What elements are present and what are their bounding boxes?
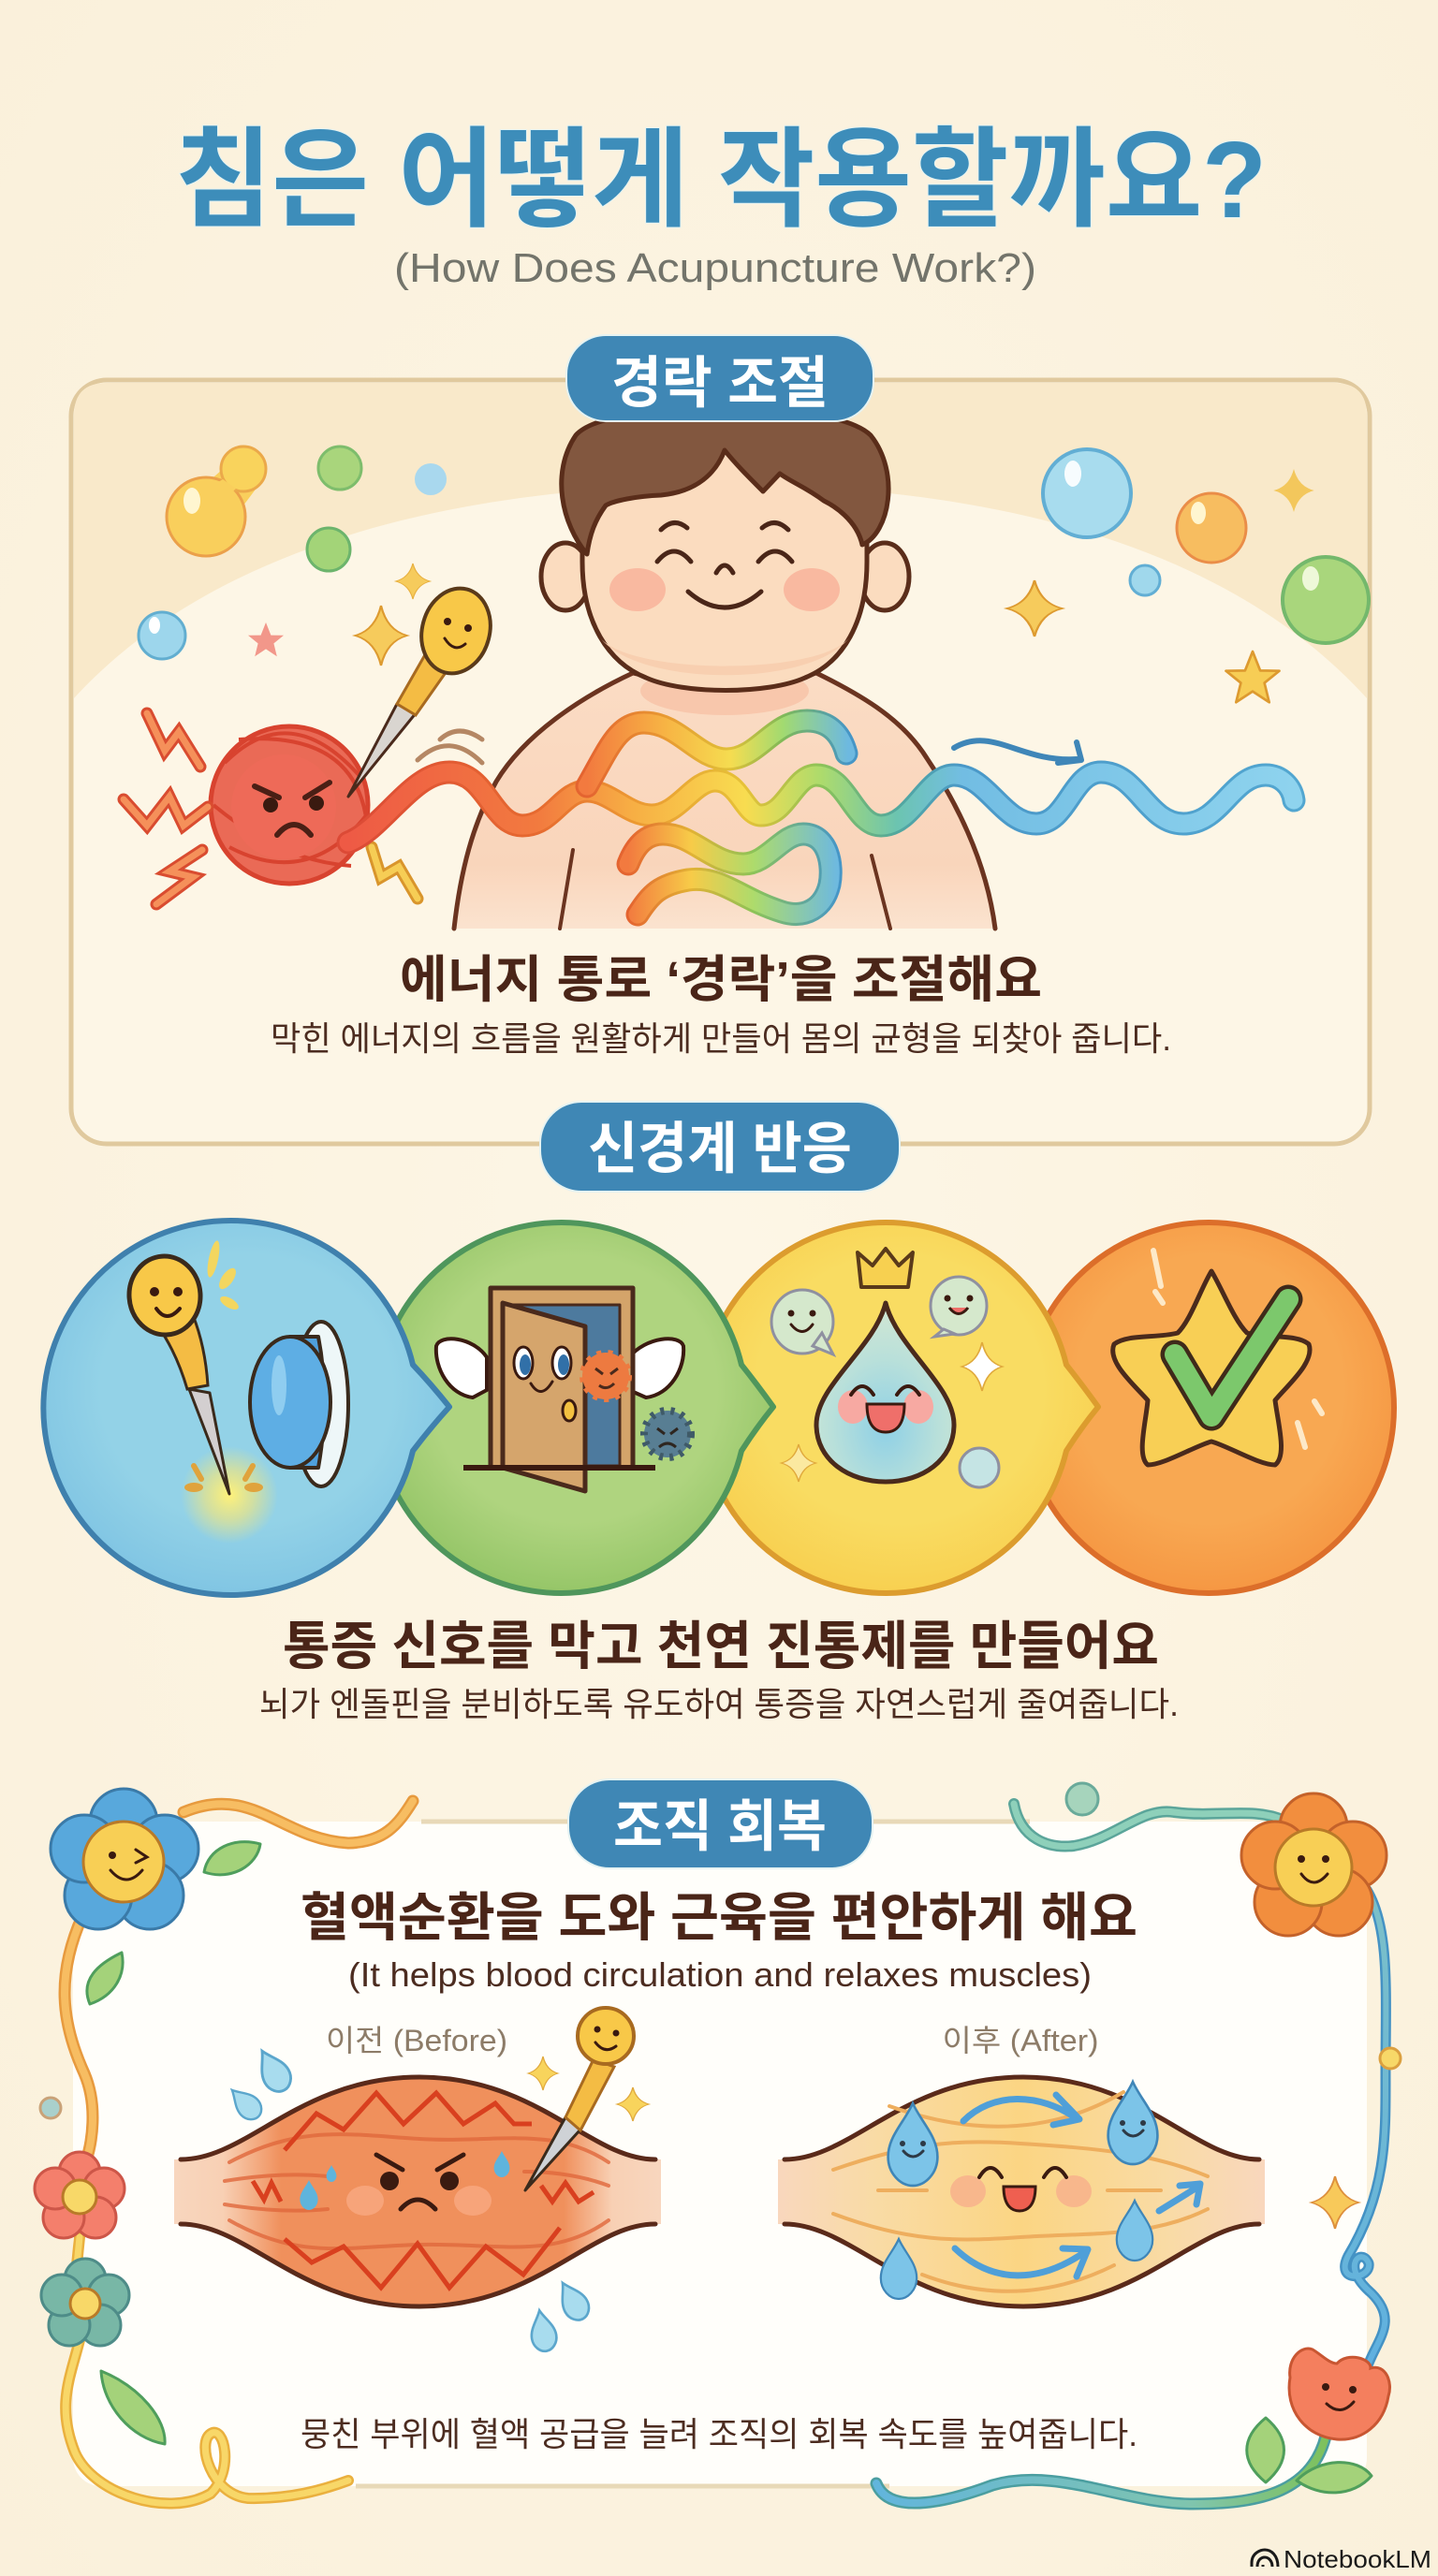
icon: smiling needle bbox=[126, 1239, 263, 1494]
flower: blue smiling bbox=[51, 1789, 198, 1929]
icon: flow arrows bbox=[955, 2095, 1200, 2276]
panel: nervous system flow bbox=[43, 1221, 1394, 1595]
heading: blood circulation: 혈액순환을 도와 근육을 편안하게 해요 bbox=[301, 1888, 1137, 1947]
smiling acupuncture needle bbox=[348, 580, 500, 797]
heading: 에너지 통로 ‘경락’을 조절해요 bbox=[400, 952, 1042, 1008]
section pill: meridian bbox=[566, 335, 873, 421]
icon: glow bbox=[181, 1446, 278, 1544]
icon: crown bbox=[858, 1249, 913, 1287]
label: before: 이전 (Before) bbox=[326, 2024, 507, 2057]
energy wave: lower branch bbox=[628, 834, 830, 915]
panel background bbox=[71, 380, 1370, 1144]
section pill: nervous system bbox=[540, 1102, 900, 1192]
step 2: door gate with wings bbox=[375, 1222, 773, 1593]
step 1: needle meets nerve signal bbox=[43, 1221, 449, 1595]
icon: sweat drops bbox=[224, 2044, 594, 2353]
caption: 뭉친 부위에 혈액 공급을 늘려 조직의 회복 속도를 높여줍니다. bbox=[301, 2415, 1137, 2453]
icon: star bbox=[1113, 1271, 1310, 1465]
energy wave: upper branch bbox=[587, 721, 846, 786]
icon: germs bbox=[582, 1353, 691, 1457]
icon: water drops bbox=[881, 2082, 1157, 2299]
description: 막힌 에너지의 흐름을 원활하게 만들어 몸의 균형을 되찾아 줍니다. bbox=[271, 1019, 1171, 1058]
muscle: after relaxed bbox=[778, 2077, 1265, 2306]
section pill: tissue recovery: 조직 회복 bbox=[613, 1795, 827, 1858]
muscle: before tense bbox=[174, 2008, 661, 2353]
flow arrow bbox=[954, 740, 1081, 763]
NotebookLM logo: NotebookLM bbox=[1284, 2545, 1431, 2573]
section pill: meridian: 경락 조절 bbox=[611, 352, 829, 415]
lightning bolts bbox=[124, 713, 418, 904]
character: boy body bbox=[454, 666, 995, 929]
motion lines bbox=[418, 731, 482, 763]
red knot of blocked energy bbox=[211, 726, 368, 884]
step 4: star and check bbox=[1023, 1222, 1394, 1593]
flower: orange smiling bbox=[1241, 1793, 1387, 1936]
panel: meridian regulation bbox=[71, 380, 1370, 1144]
flower: coral bbox=[35, 2152, 125, 2238]
panel background bbox=[73, 1822, 1367, 2486]
flower: teal bbox=[41, 2259, 129, 2346]
step 3: happy water drop bbox=[700, 1222, 1098, 1593]
subtitle: (How Does Acupuncture Work?) bbox=[394, 245, 1036, 291]
icon: check mark bbox=[1175, 1299, 1288, 1416]
leaves bbox=[87, 1842, 1372, 2493]
title: 침은 어떻게 작용할까요? bbox=[175, 119, 1267, 241]
small circles bbox=[40, 1783, 1401, 2229]
icon: smiling bubbles bbox=[771, 1277, 999, 1487]
icon: wings bbox=[436, 1339, 487, 1398]
description: endorphin: 뇌가 엔돌핀을 분비하도록 유도하여 통증을 자연스럽게 줄여줍니다. bbox=[259, 1685, 1179, 1723]
heading: pain signal: 통증 신호를 막고 천연 진통제를 만들어요 bbox=[283, 1617, 1159, 1676]
icon: nerve disc bbox=[250, 1322, 348, 1486]
character: boy head bbox=[541, 407, 909, 691]
bubbles and sparkles bbox=[139, 446, 1369, 702]
label: after: 이후 (After) bbox=[942, 2024, 1099, 2057]
tan arched backdrop bbox=[74, 383, 1367, 698]
energy wave: main rainbow meridian bbox=[348, 772, 1294, 842]
icon: door bbox=[463, 1288, 655, 1491]
section pill: nervous system: 신경계 반응 bbox=[588, 1118, 852, 1180]
english subtitle: (It helps blood circulation and relaxes muscles) bbox=[348, 1955, 1092, 1994]
panel: tissue recovery bbox=[35, 1783, 1401, 2504]
icon: needle bbox=[525, 2008, 634, 2190]
icon: water drop bbox=[816, 1303, 954, 1482]
vines bbox=[65, 1801, 1386, 2504]
section pill: tissue recovery bbox=[568, 1779, 873, 1868]
flower: tulip bbox=[1289, 2349, 1389, 2439]
